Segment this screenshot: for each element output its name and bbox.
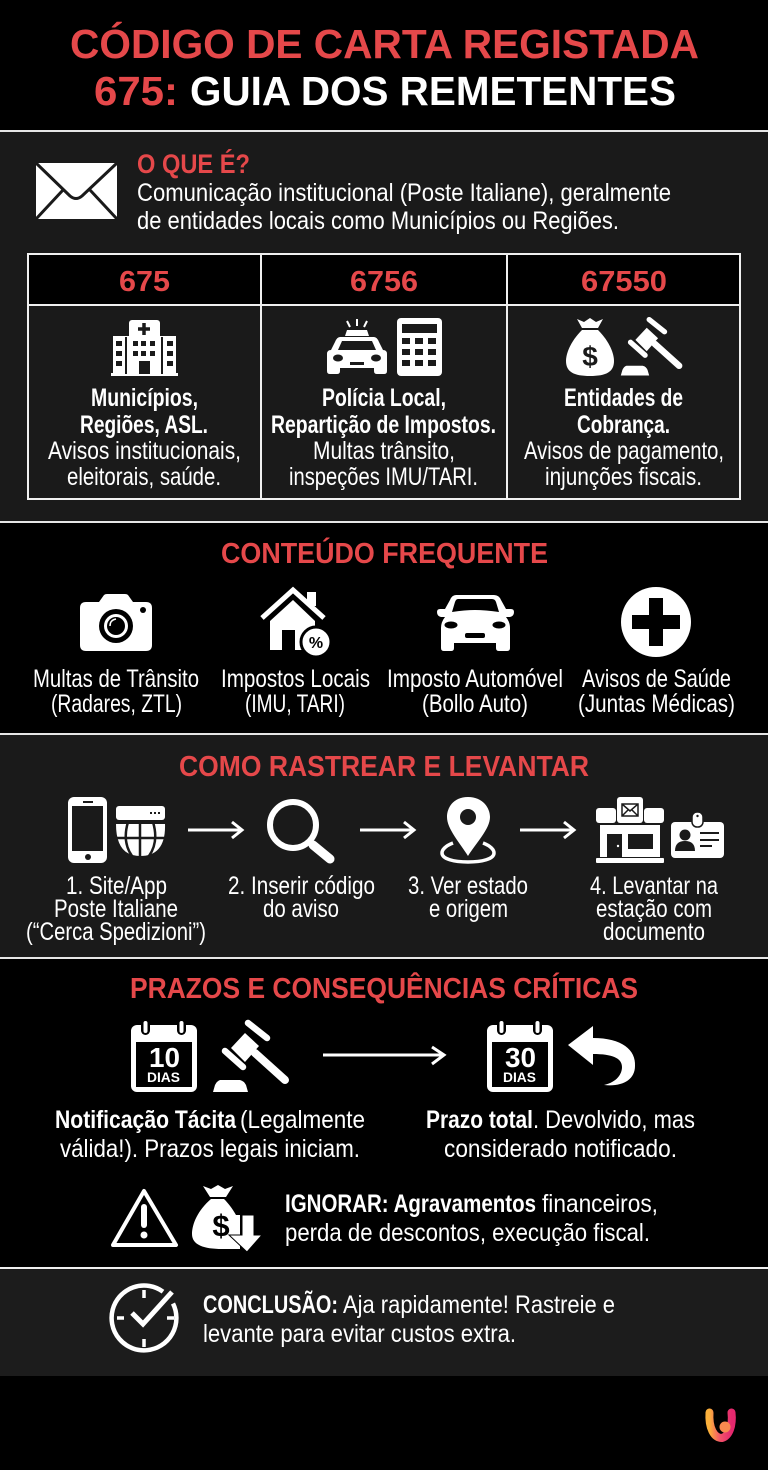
step 2 label: do aviso bbox=[263, 895, 339, 923]
step 3 label: e origem bbox=[429, 895, 508, 923]
icon: house with percent bbox=[262, 590, 331, 657]
text: ignorar: perda de descontos, execução fiscal. bbox=[285, 1219, 650, 1247]
label: avisos de saúde: (Juntas Médicas) bbox=[578, 690, 735, 718]
panel: conclusão bbox=[0, 1267, 768, 1376]
heading: conteúdo frequente: CONTEÚDO FREQUENTE bbox=[221, 536, 548, 570]
icon: return arrow bbox=[568, 1026, 635, 1085]
column 675 text: eleitorais, saúde. bbox=[67, 463, 221, 491]
icon: calculator bbox=[397, 318, 442, 376]
label: impostos locais: Impostos Locais bbox=[221, 665, 370, 693]
icon: medical cross bbox=[621, 587, 691, 657]
text: description bbox=[137, 179, 671, 235]
icon: globe bbox=[116, 806, 165, 857]
label: avisos de saúde: Avisos de Saúde bbox=[582, 665, 731, 693]
text: ignorar bbox=[285, 1190, 658, 1247]
step 4 label: 4. Levantar na bbox=[590, 872, 718, 900]
step 4 label bbox=[590, 872, 718, 946]
step 3 label: 3. Ver estado bbox=[408, 872, 528, 900]
icon: car bbox=[437, 595, 514, 651]
icon: money bag with down arrow: $ bbox=[212, 1208, 230, 1243]
icon: gavel bbox=[213, 1023, 285, 1092]
arrow 3 bbox=[520, 822, 574, 838]
icon: money bag: $ bbox=[582, 341, 598, 372]
column 67550 text: Avisos de pagamento, bbox=[524, 437, 724, 465]
panel: como rastrear bbox=[0, 733, 768, 958]
step 1 label: Poste Italiane bbox=[54, 895, 178, 923]
step 1 label: 1. Site/App bbox=[66, 872, 167, 900]
text: description: Comunicação institucional (Poste Italiane), geralmente bbox=[137, 179, 671, 207]
icon: house with percent: % bbox=[309, 635, 323, 652]
text: prazo total: . Devolvido, mas bbox=[533, 1106, 695, 1134]
icon: warning bbox=[113, 1191, 176, 1245]
text: prazo total bbox=[426, 1106, 695, 1163]
column 6756 text: Polícia Local, bbox=[322, 384, 446, 412]
text: prazo total: Prazo total bbox=[426, 1106, 533, 1134]
label: multas: Multas de Trânsito bbox=[33, 665, 199, 693]
label: imposto automóvel: Imposto Automóvel bbox=[387, 665, 563, 693]
label: impostos locais: (IMU, TARI) bbox=[245, 690, 345, 718]
column 67550 text: injunções fiscais. bbox=[545, 463, 702, 491]
step 1 label bbox=[26, 872, 206, 946]
column 6756 text: inspeções IMU/TARI. bbox=[289, 463, 478, 491]
icon: calendar 30 dias: 30 bbox=[505, 1042, 536, 1073]
text: notificação tácita: (Legalmente bbox=[240, 1106, 365, 1134]
title: CÓDIGO DE CARTA REGISTADA bbox=[70, 21, 699, 67]
icon: post office bbox=[596, 797, 664, 863]
column 6756 text bbox=[271, 384, 496, 491]
column 67550 text: Entidades de bbox=[564, 384, 683, 412]
label: multas bbox=[33, 665, 199, 718]
table: codes bbox=[28, 254, 740, 499]
heading: prazos: PRAZOS E CONSEQUÊNCIAS CRÍTICAS bbox=[130, 971, 638, 1005]
text: conclusão: Aja rapidamente! Rastreie e bbox=[343, 1291, 615, 1319]
text: prazo total: considerado notificado. bbox=[444, 1135, 677, 1163]
icon: magnifier bbox=[270, 802, 330, 859]
title: GUIA DOS REMETENTES bbox=[190, 68, 676, 114]
step 1 label: (“Cerca Spedizioni”) bbox=[26, 918, 206, 946]
text: notificação tácita: válida!). Prazos legais iniciam. bbox=[60, 1135, 360, 1163]
column 675 text bbox=[48, 384, 241, 491]
icon: envelope bbox=[36, 163, 117, 219]
icon: location pin bbox=[442, 797, 494, 862]
icon: money bag bbox=[566, 318, 614, 376]
column 6756 text: Repartição de Impostos. bbox=[271, 411, 496, 439]
text: conclusão: levante para evitar custos extra. bbox=[203, 1320, 516, 1348]
icon: calendar 10 dias bbox=[131, 1019, 197, 1092]
code 67550: 67550 bbox=[581, 266, 667, 298]
code 675: 675 bbox=[119, 266, 170, 298]
text: conclusão bbox=[203, 1289, 615, 1348]
panel: prazos bbox=[0, 957, 768, 1252]
icon: camera bbox=[80, 594, 152, 651]
arrow 1 bbox=[188, 822, 242, 838]
heading: o que é: O QUE É? bbox=[137, 148, 250, 179]
icon: id badge bbox=[671, 812, 724, 858]
column 67550 text: Cobrança. bbox=[577, 411, 670, 439]
title: 675: bbox=[94, 68, 178, 114]
code 6756: 6756 bbox=[350, 266, 418, 298]
step 4 label: documento bbox=[603, 918, 705, 946]
icon: calendar 30 dias bbox=[487, 1019, 553, 1092]
logo bbox=[709, 1412, 732, 1438]
column 675 text: Regiões, ASL. bbox=[80, 411, 208, 439]
icon: calendar 10 dias: 10 bbox=[149, 1042, 180, 1073]
column 675 text: Municípios, bbox=[91, 384, 198, 412]
text: notificação tácita: Notificação Tácita bbox=[55, 1106, 237, 1134]
label: imposto automóvel bbox=[387, 665, 563, 718]
column 67550 text bbox=[524, 384, 724, 491]
icon: calendar 30 dias: DIAS bbox=[503, 1069, 536, 1085]
text: description: de entidades locais como Municípios ou Regiões. bbox=[137, 207, 619, 235]
heading: como rastrear: COMO RASTREAR E LEVANTAR bbox=[179, 751, 589, 783]
title bbox=[70, 21, 699, 114]
icon: calendar 10 dias: DIAS bbox=[147, 1069, 180, 1085]
icon: gavel bbox=[621, 320, 679, 376]
text: ignorar: financeiros, bbox=[542, 1190, 658, 1218]
text: ignorar: IGNORAR: Agravamentos bbox=[285, 1190, 536, 1218]
icon: clock with check bbox=[112, 1286, 176, 1350]
label: impostos locais bbox=[221, 665, 370, 718]
label: avisos de saúde bbox=[578, 665, 735, 718]
icon: hospital bbox=[111, 320, 178, 376]
panel: o que é bbox=[0, 130, 768, 521]
icon: phone bbox=[68, 797, 107, 863]
long arrow bbox=[323, 1047, 444, 1064]
text: notificação tácita bbox=[55, 1106, 365, 1163]
label: imposto automóvel: (Bollo Auto) bbox=[422, 690, 528, 718]
label: multas: (Radares, ZTL) bbox=[51, 690, 182, 718]
step 3 label bbox=[408, 872, 528, 923]
panel: conteúdo frequente bbox=[0, 521, 768, 718]
column 6756 text: Multas trânsito, bbox=[313, 437, 455, 465]
text: conclusão: CONCLUSÃO: bbox=[203, 1289, 338, 1319]
step 2 label: 2. Inserir código bbox=[228, 872, 375, 900]
step 2 label bbox=[228, 872, 375, 923]
column 675 text: Avisos institucionais, bbox=[48, 437, 241, 465]
step 4 label: estação com bbox=[596, 895, 712, 923]
icon: police car bbox=[327, 319, 387, 374]
icon: money bag with down arrow bbox=[192, 1185, 262, 1252]
arrow 2 bbox=[360, 822, 414, 838]
